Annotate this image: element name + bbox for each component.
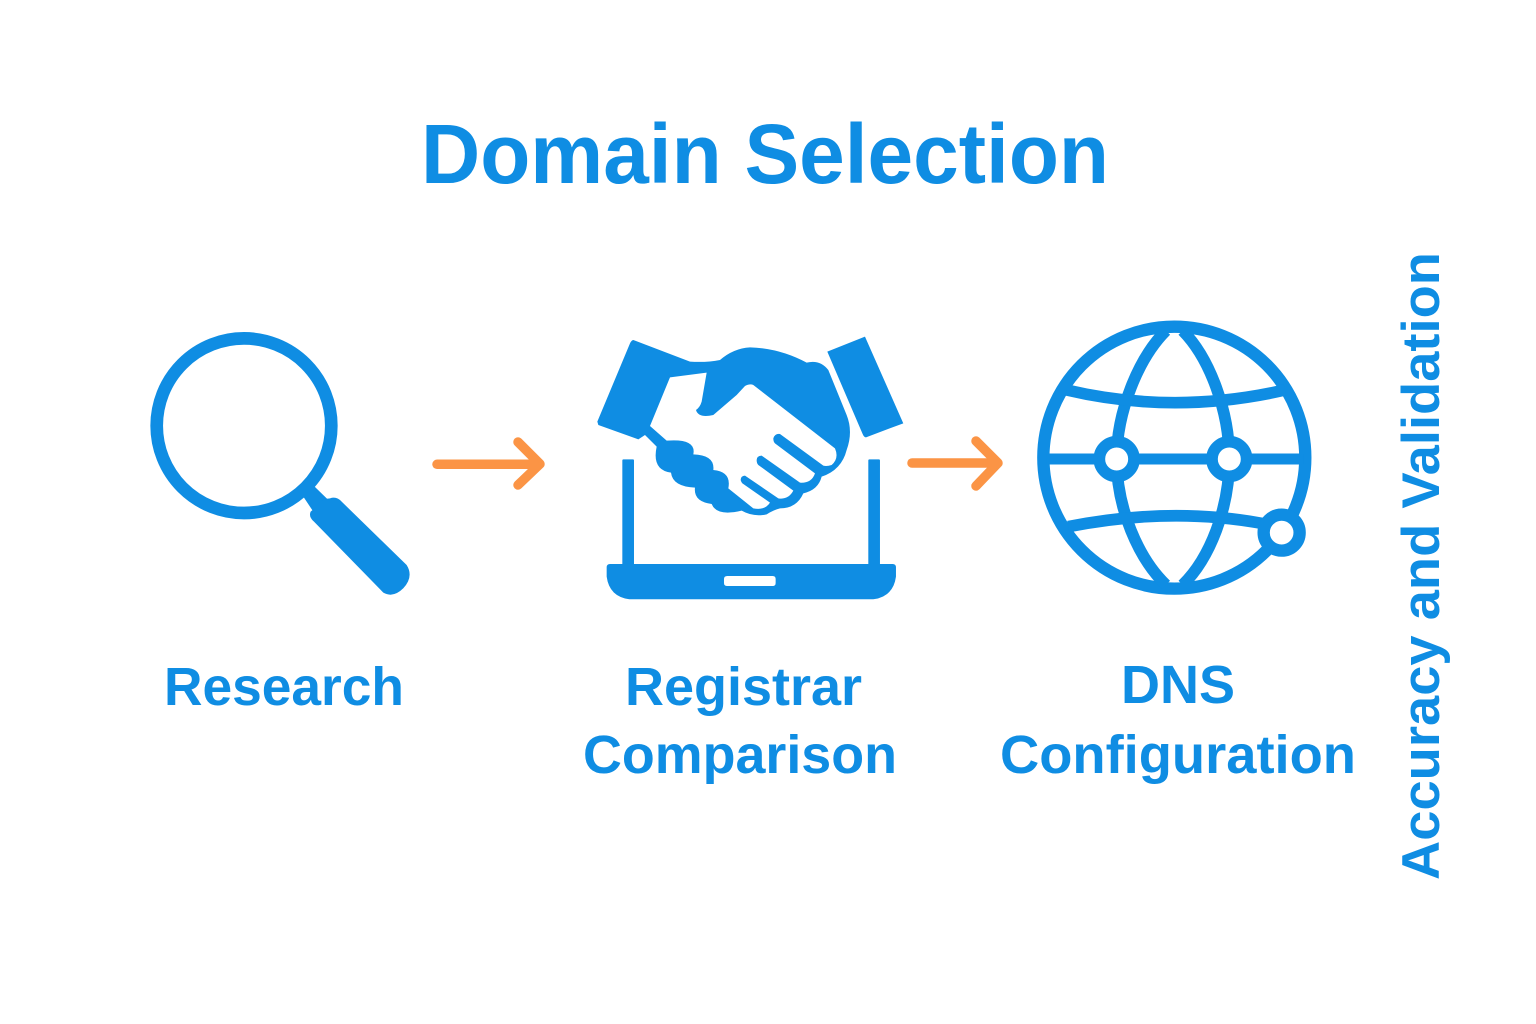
right cuff bbox=[827, 337, 903, 437]
network nodes bbox=[1099, 442, 1134, 476]
label: dns configuration: Configuration bbox=[1000, 725, 1356, 785]
label: registrar comparison: Comparison bbox=[583, 725, 897, 785]
equator bbox=[1047, 442, 1303, 475]
arrow: registrar to dns bbox=[912, 441, 998, 486]
laptop screen sides bbox=[622, 459, 634, 566]
label: registrar comparison bbox=[583, 657, 897, 785]
icon: handshake over laptop bbox=[597, 337, 903, 599]
arrow: research to registrar bbox=[437, 442, 540, 485]
globe outline bbox=[1043, 327, 1305, 589]
label: registrar comparison: Registrar bbox=[625, 657, 862, 717]
vertical label: accuracy and validation: Accuracy and Validation bbox=[1392, 252, 1451, 880]
laptop base bbox=[607, 564, 896, 599]
label: dns configuration: DNS bbox=[1121, 655, 1235, 715]
title: Domain Selection bbox=[421, 107, 1109, 201]
icon: magnifying glass bbox=[157, 338, 410, 595]
upper latitude bbox=[1067, 390, 1285, 403]
label: dns configuration bbox=[1000, 655, 1356, 785]
meridians bbox=[1117, 331, 1166, 585]
label: research: Research bbox=[164, 657, 404, 717]
handshake bbox=[597, 340, 850, 515]
icon: globe network bbox=[1043, 327, 1305, 589]
lower latitude bbox=[1068, 516, 1262, 527]
